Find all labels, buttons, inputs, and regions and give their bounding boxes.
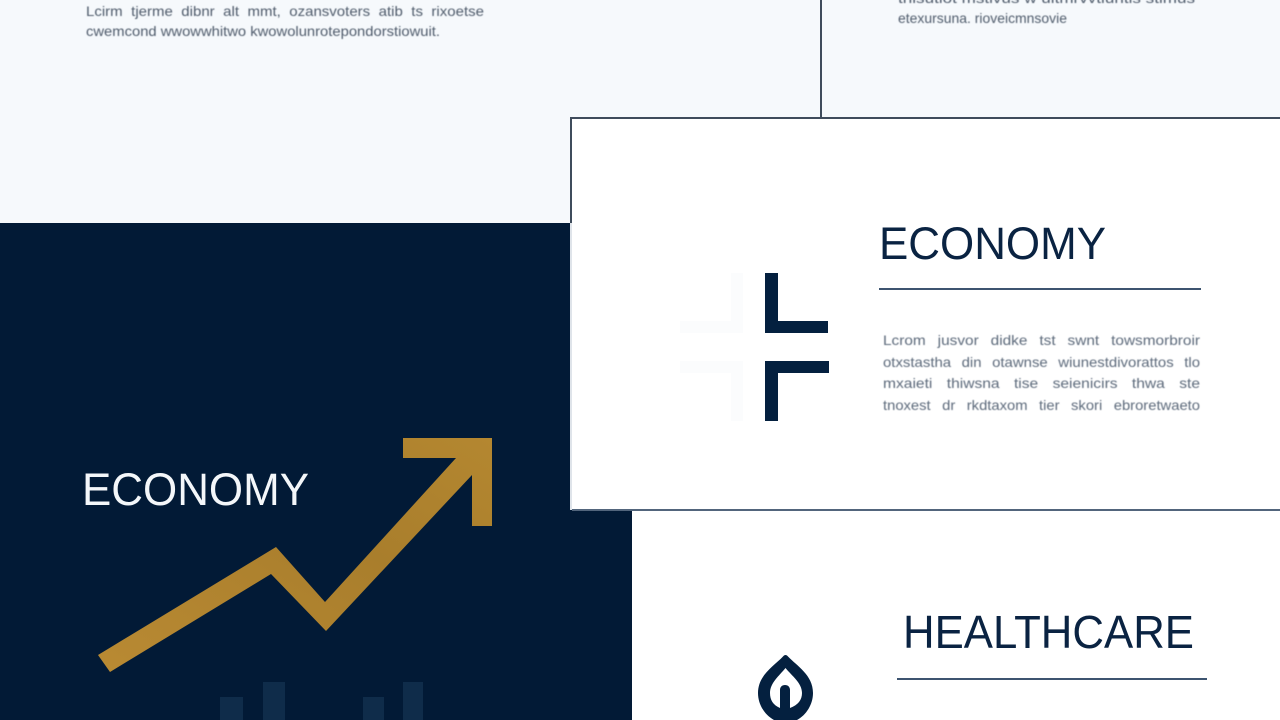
panel: top left light panel [0,0,821,223]
text block: economy paragraph: mxaieti thiwsna tise seienicirs thwa ste [883,375,1200,391]
text block: top right paragraph [898,0,1195,26]
panel: navy economy panel [0,223,632,720]
chart: faint background bars [220,682,423,720]
panel: economy white card [570,117,1280,511]
text block: economy paragraph: Lcrom jusvor didke tst swnt towsmorbroir [883,332,1200,348]
panel: top right light panel [820,0,1280,118]
icon: gold rising arrow [98,438,492,672]
divider under healthcare heading [897,678,1207,680]
text block: economy paragraph [883,332,1200,413]
text block: economy paragraph: tnoxest dr rkdtaxom tier skori ebroretwaeto [883,397,1200,413]
icon: healthcare flame drop [758,655,813,720]
divider under economy heading [879,288,1201,290]
text block: top right paragraph: etexursuna. rioveicmnsovie [898,10,1067,26]
text block: top left paragraph: cwemcond wwowwhitwo kwowolunrotepondorstiowuit. [86,23,440,39]
text block: top left paragraph: Lcirm tjerme dibnr alt mmt, ozansvoters atib ts rixoetse [86,3,484,19]
heading: economy on card: ECONOMY [879,218,1106,269]
heading: healthcare: HEALTHCARE [903,606,1194,658]
heading: economy on navy: ECONOMY [82,464,309,515]
icon: cross of corner brackets [680,273,829,421]
panel: healthcare white card [632,511,1280,720]
text block: economy paragraph: otxstastha din otawnse wiunestdivorattos tlo [883,354,1200,370]
text block: top left paragraph [86,3,484,39]
